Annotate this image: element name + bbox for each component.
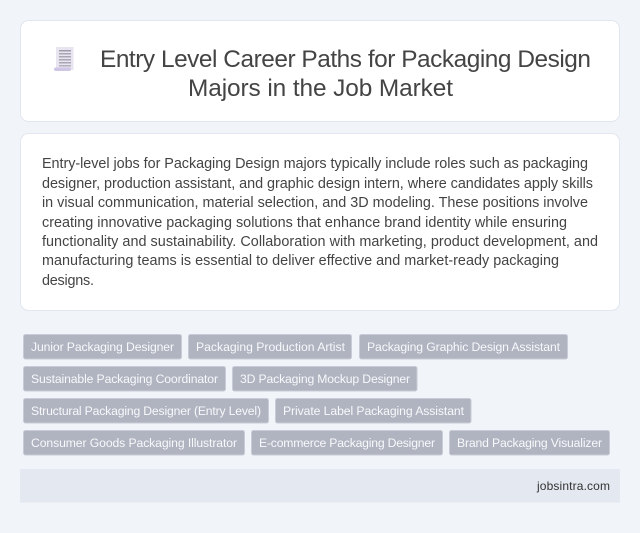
tag: 3D Packaging Mockup Designer [240,372,410,386]
title: Entry Level Career Paths for Packaging Design [100,46,591,73]
tag [24,430,244,455]
text block: description: manufacturing teams is essential to deliver effective and market-ready packaging [42,253,559,269]
panel: description [20,134,620,310]
text block: description: designer, production assistant, and graphic design intern, where candidates apply skills [42,176,593,192]
tag [276,398,471,423]
text block: description: designs. [42,273,94,289]
text block: description: Entry-level jobs for Packaging Design majors typically include roles such as packaging [42,156,588,172]
tag list [24,334,610,455]
title: Majors in the Job Market [188,75,453,102]
tag: Packaging Production Artist [196,340,346,354]
tag [24,366,226,391]
footer [20,469,620,502]
icon: document scroll [54,47,74,71]
tag [232,366,417,391]
tag: Packaging Graphic Design Assistant [367,340,561,354]
text block: description: creating innovative packaging solutions that enhance brand identity while ensuring [42,215,567,231]
tag: E-commerce Packaging Designer [259,436,435,450]
title [100,46,591,102]
tag [24,334,182,359]
text block: description: functionality and sustainability. Collaboration with marketing, product development, and [42,234,598,250]
tag [360,334,568,359]
tag: Private Label Packaging Assistant [283,404,465,418]
tag [188,334,352,359]
tag: Junior Packaging Designer [31,340,174,354]
panel: title card [20,20,620,122]
tag: Sustainable Packaging Coordinator [31,372,218,386]
footer: jobsintra.com [536,479,610,493]
text block: description [42,156,598,289]
tag: Structural Packaging Designer (Entry Level) [31,404,261,418]
tag [24,398,268,423]
tag [252,430,442,455]
text block: description: in visual communication, material selection, and 3D modeling. These positions involve [42,195,588,211]
tag [450,430,610,455]
tag: Brand Packaging Visualizer [457,436,602,450]
tag: Consumer Goods Packaging Illustrator [31,436,237,450]
